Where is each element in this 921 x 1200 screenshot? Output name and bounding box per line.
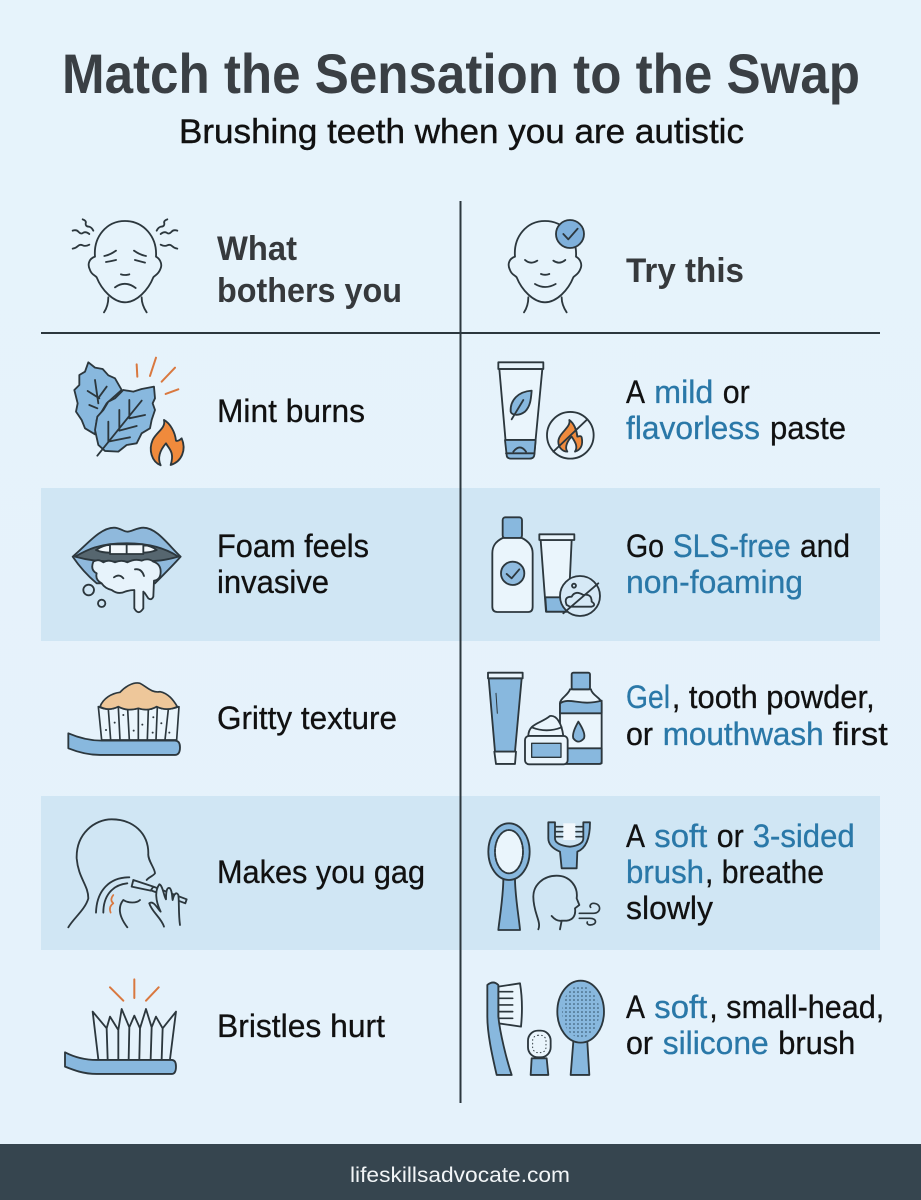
footer bar (0, 1144, 921, 1200)
label: SLS-free and non-foaming: non-foaming (626, 564, 803, 600)
label: soft, small-head or silicone brush: A (626, 989, 646, 1025)
icon: three soft brushes (487, 981, 604, 1075)
label: gel, tooth powder or mouthwash first: Gel (626, 679, 670, 715)
label: soft, small-head or silicone brush: silicone (663, 1025, 769, 1061)
icon: stressed face (73, 219, 177, 312)
icon: toothbrush with gritty paste (68, 683, 180, 755)
label: soft or 3-sided brush, breathe slowly: A (626, 818, 646, 854)
footer text: lifeskillsadvocate.com (350, 1164, 570, 1187)
row 1 swap: mild paste (498, 362, 846, 459)
icon: soft brush, 3-sided brush, breathing head (488, 822, 600, 930)
column divider (460, 201, 462, 1103)
label: mild or flavorless paste: A (626, 374, 646, 410)
label: soft, small-head or silicone brush: soft (654, 989, 707, 1025)
row 3 problem: gritty (68, 683, 397, 755)
label: foam feels invasive: invasive (217, 564, 329, 600)
label: foam feels invasive: Foam feels (217, 528, 369, 564)
label: gel, tooth powder or mouthwash first: , tooth powder, (672, 679, 875, 715)
heading: try this: Try this (626, 252, 744, 290)
icon: calm face with check badge (509, 220, 584, 312)
title: Match the Sensation to the Swap (62, 42, 860, 105)
label: soft or 3-sided brush, breathe slowly (626, 818, 855, 926)
label: soft or 3-sided brush, breathe slowly: or (717, 818, 744, 854)
label: mild or flavorless paste: paste (770, 410, 846, 446)
row 5 swap: soft, small-head or silicone brush (487, 981, 884, 1075)
label: mild or flavorless paste (626, 374, 846, 446)
label: soft or 3-sided brush, breathe slowly: slowly (626, 890, 713, 926)
icon: toothbrush with sharp bristles (65, 979, 176, 1074)
label: foam feels invasive (217, 528, 369, 600)
icon: toothpaste tube and no-flame sign (498, 362, 594, 459)
heading: what bothers you: bothers you (217, 272, 402, 310)
heading: what bothers you (217, 230, 402, 310)
label: soft or 3-sided brush, breathe slowly: brush (626, 854, 704, 890)
label: mild or flavorless paste: flavorless (626, 410, 760, 446)
label: gel, tooth powder or mouthwash first: or (626, 716, 653, 752)
row 4 swap: soft or 3-sided brush (488, 818, 855, 930)
icon: head profile brushing (68, 819, 187, 927)
row 3 swap: gel, powder, mouthwash (488, 673, 888, 764)
label: mild or flavorless paste: mild (654, 374, 713, 410)
label: gel, tooth powder or mouthwash first: mouthwash (663, 716, 824, 752)
row 4 problem: gag (68, 819, 425, 927)
label: soft, small-head or silicone brush: or (626, 1025, 653, 1061)
label: gritty texture: Gritty texture (217, 700, 397, 736)
label: SLS-free and non-foaming (626, 528, 850, 600)
label: gel, tooth powder or mouthwash first (626, 679, 888, 752)
label: SLS-free and non-foaming: and (800, 528, 850, 564)
band: row 2 background (41, 488, 880, 641)
icon: bottle, tube and no-foam sign (492, 517, 600, 616)
header: what bothers you (73, 219, 402, 312)
row 1 problem: mint burns (74, 358, 365, 465)
label: SLS-free and non-foaming: SLS-free (673, 528, 791, 564)
label: SLS-free and non-foaming: Go (626, 528, 664, 564)
subtitle: Brushing teeth when you are autistic (179, 113, 744, 151)
header: try this (509, 220, 744, 312)
label: mild or flavorless paste: or (723, 374, 750, 410)
label: soft or 3-sided brush, breathe slowly: 3-sided (753, 818, 855, 854)
label: gel, tooth powder or mouthwash first: first (833, 716, 888, 752)
icon: gel tube, powder jar, mouthwash (488, 673, 602, 764)
label: soft, small-head or silicone brush: , small-head, (709, 989, 884, 1025)
label: soft, small-head or silicone brush (626, 989, 884, 1061)
heading: what bothers you: What (217, 230, 297, 268)
row 5 problem: bristles (65, 979, 385, 1074)
label: mint burns: Mint burns (217, 393, 365, 429)
icon: mint leaves and flame (74, 358, 184, 465)
label: makes you gag: Makes you gag (217, 854, 425, 890)
row 2 problem: foam (73, 528, 369, 612)
label: soft or 3-sided brush, breathe slowly: , breathe (705, 854, 824, 890)
label: soft or 3-sided brush, breathe slowly: soft (654, 818, 707, 854)
label: bristles hurt: Bristles hurt (217, 1008, 385, 1044)
icon: mouth with foam (73, 528, 181, 612)
band: row 4 background (41, 796, 880, 950)
row 2 swap: SLS-free (492, 517, 850, 616)
header divider (41, 332, 880, 334)
label: soft, small-head or silicone brush: brush (778, 1025, 855, 1061)
